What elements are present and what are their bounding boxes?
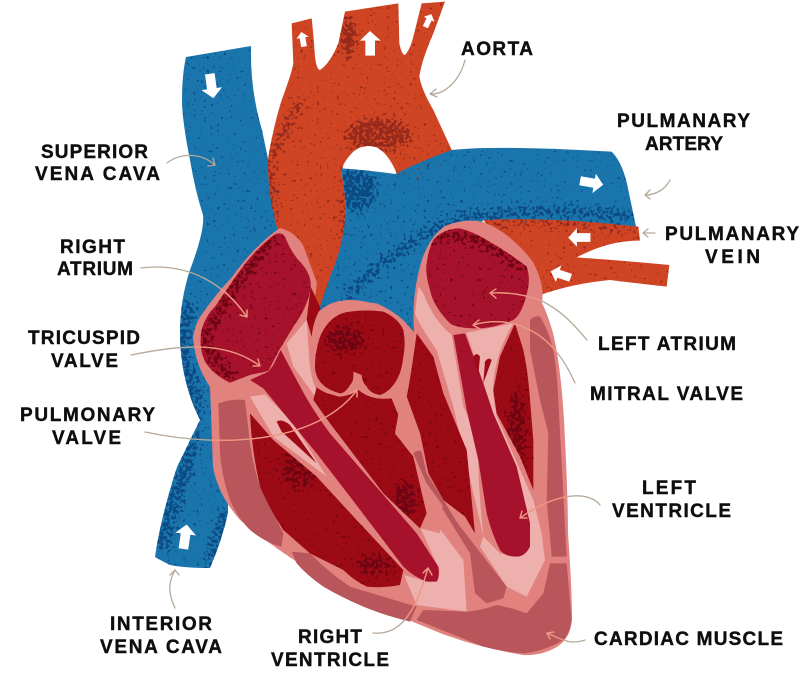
aorta vessel [268, 2, 453, 320]
left ventricle inflow band [453, 333, 530, 557]
leader: right ventricle [373, 568, 432, 633]
label: pulmonary valve line 1: PULMONARY [20, 405, 155, 426]
slits in mitral cords [473, 354, 492, 383]
arrow: superior vena cava [199, 72, 223, 100]
muscle: apex [417, 563, 572, 653]
slit in right ventricle wedge [277, 421, 317, 463]
label: left atrium: LEFT ATRIUM [598, 334, 736, 355]
pale lining: between atrium and trunk [287, 320, 330, 417]
arrow: pulmonary vein upper [568, 228, 590, 247]
arrow: aorta centre [360, 31, 381, 56]
label: interior vena cava line 2: VENA CAVA [100, 637, 222, 658]
septum muscle strip over stalk [413, 451, 470, 543]
pulmonary artery vessel [317, 148, 636, 333]
label: right atrium line 2: ATRIUM [57, 259, 133, 280]
leader: pulmonary valve [145, 390, 357, 440]
label: tricuspid valve line 2: VALVE [51, 351, 118, 372]
leader: right atrium [141, 267, 247, 317]
vena cava vessel [155, 46, 285, 568]
arrow: aorta right branch [420, 12, 437, 30]
label: mitral valve: MITRAL VALVE [590, 384, 743, 405]
leader: aorta [430, 60, 465, 97]
heart outer wall [193, 221, 572, 655]
crimson wedge beside trunk [307, 287, 321, 337]
label: aorta: AORTA [461, 39, 533, 60]
label: right ventricle line 2: VENTRICLE [271, 650, 389, 671]
left atrium chamber [426, 228, 529, 328]
label: tricuspid valve line 1: TRICUSPID [28, 328, 140, 349]
pulmonary outflow chamber [313, 387, 427, 528]
arrow: aorta left branch [295, 31, 310, 48]
label: right atrium line 1: RIGHT [60, 237, 125, 258]
label: interior vena cava line 1: INTERIOR [110, 614, 212, 635]
right ventricle chamber [250, 413, 403, 587]
label: pulmonary vein line 1: PULMANARY [665, 224, 799, 245]
muscle: right wall [530, 316, 567, 557]
stipple on blue vessels [156, 50, 635, 568]
leader: superior vena cava [167, 155, 215, 166]
pale lining: right ventricle wedge [250, 394, 327, 477]
arrow: pulmonary artery [578, 171, 605, 195]
stipple in chambers [200, 230, 534, 586]
label: left ventricle line 1: LEFT [642, 478, 696, 499]
arrow: inferior vena cava [173, 523, 197, 550]
pale lining: right ventricle tip [404, 515, 467, 612]
pulmonary vein vessel [483, 219, 669, 295]
label: pulmonary vein line 2: VEIN [705, 247, 760, 268]
white flow arrows [173, 12, 605, 550]
leader lines [131, 60, 670, 642]
pulmonary valve chamber [315, 310, 405, 395]
pale lining: septal column [415, 287, 483, 537]
muscle: septum [427, 483, 507, 603]
pale lining: left ventricle [463, 323, 545, 597]
label: left ventricle line 2: VENTRICLE [612, 501, 731, 522]
leader: left ventricle [520, 496, 600, 518]
leader: tricuspid valve [131, 347, 260, 366]
leader: left atrium [490, 289, 587, 340]
muscle: left wall [218, 400, 283, 547]
pulmonary valve ring and stalk [313, 302, 443, 533]
label: superior vena cava line 2: VENA CAVA [35, 164, 160, 185]
label: pulmonary valve line 2: VALVE [52, 428, 121, 449]
leader: cardiac muscle [547, 632, 585, 642]
muscle: lower wall [292, 552, 417, 622]
left ventricle outer chamber [493, 323, 533, 490]
leader: mitral valve [473, 320, 575, 383]
stipple on red vessels [260, 0, 680, 310]
label: pulmonary artery line 2: ARTERY [645, 134, 723, 155]
label: superior vena cava line 1: SUPERIOR [41, 142, 148, 163]
leader: inferior vena cava [170, 570, 179, 608]
right atrium chamber [201, 233, 311, 383]
arrow: pulmonary vein lower [548, 263, 573, 286]
leader: pulmonary artery [645, 180, 670, 199]
leader: pulmonary vein [643, 229, 655, 237]
leader lines inside heart (salmon) [194, 288, 568, 641]
label: cardiac muscle: CARDIAC MUSCLE [594, 629, 783, 650]
septal chamber [407, 333, 475, 533]
label: right ventricle line 1: RIGHT [298, 627, 362, 648]
label: pulmonary artery line 1: PULMANARY [617, 111, 750, 132]
heart interior layers [218, 287, 572, 653]
heart [193, 221, 572, 655]
right ventricle inflow band [250, 350, 439, 582]
